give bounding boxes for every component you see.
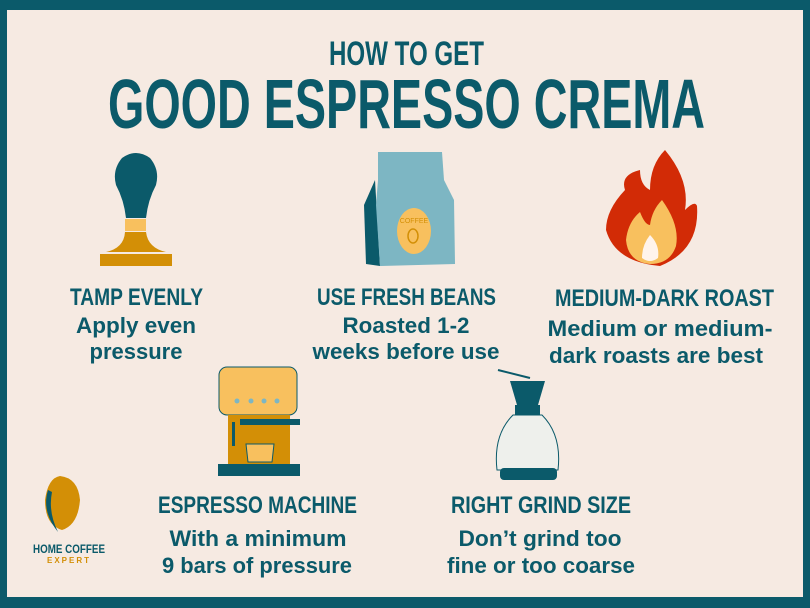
- icon: grinder: [496, 370, 559, 480]
- text: tamp body: Apply even: [76, 313, 196, 338]
- heading: espresso machine: ESPRESSO MACHINE: [158, 492, 357, 519]
- heading: tamp evenly: TAMP EVENLY: [70, 284, 203, 311]
- icon: coffee bag: [364, 152, 455, 266]
- text: roast body: Medium or medium-: [548, 316, 772, 341]
- text: roast body: dark roasts are best: [549, 343, 764, 368]
- text: roast body: [548, 316, 772, 368]
- text: beans body: weeks before use: [311, 339, 500, 364]
- text: grind body: fine or too coarse: [447, 553, 635, 578]
- text: tamp body: pressure: [90, 339, 182, 364]
- icon: flame: [606, 150, 697, 266]
- heading: use fresh beans: USE FRESH BEANS: [317, 284, 496, 311]
- icon: coffee bag: COFFEE: [400, 218, 429, 225]
- text: machine body: [162, 526, 352, 578]
- logo: home coffee expert: EXPERT: [47, 556, 91, 565]
- logo: home coffee expert: HOME COFFEE: [33, 542, 105, 556]
- text: beans body: Roasted 1-2: [342, 313, 470, 338]
- text: machine body: With a minimum: [170, 526, 346, 551]
- logo: home coffee expert: [33, 476, 105, 565]
- icon: espresso machine: [218, 367, 300, 476]
- text: tamp body: [76, 313, 196, 364]
- text: grind body: [447, 526, 635, 578]
- heading: right grind size: RIGHT GRIND SIZE: [451, 492, 631, 519]
- text: machine body: 9 bars of pressure: [162, 553, 352, 578]
- text: beans body: [311, 313, 500, 364]
- text: grind body: Don’t grind too: [458, 526, 622, 551]
- title: how to get: HOW TO GET: [329, 35, 484, 73]
- icon: tamper: [100, 153, 172, 266]
